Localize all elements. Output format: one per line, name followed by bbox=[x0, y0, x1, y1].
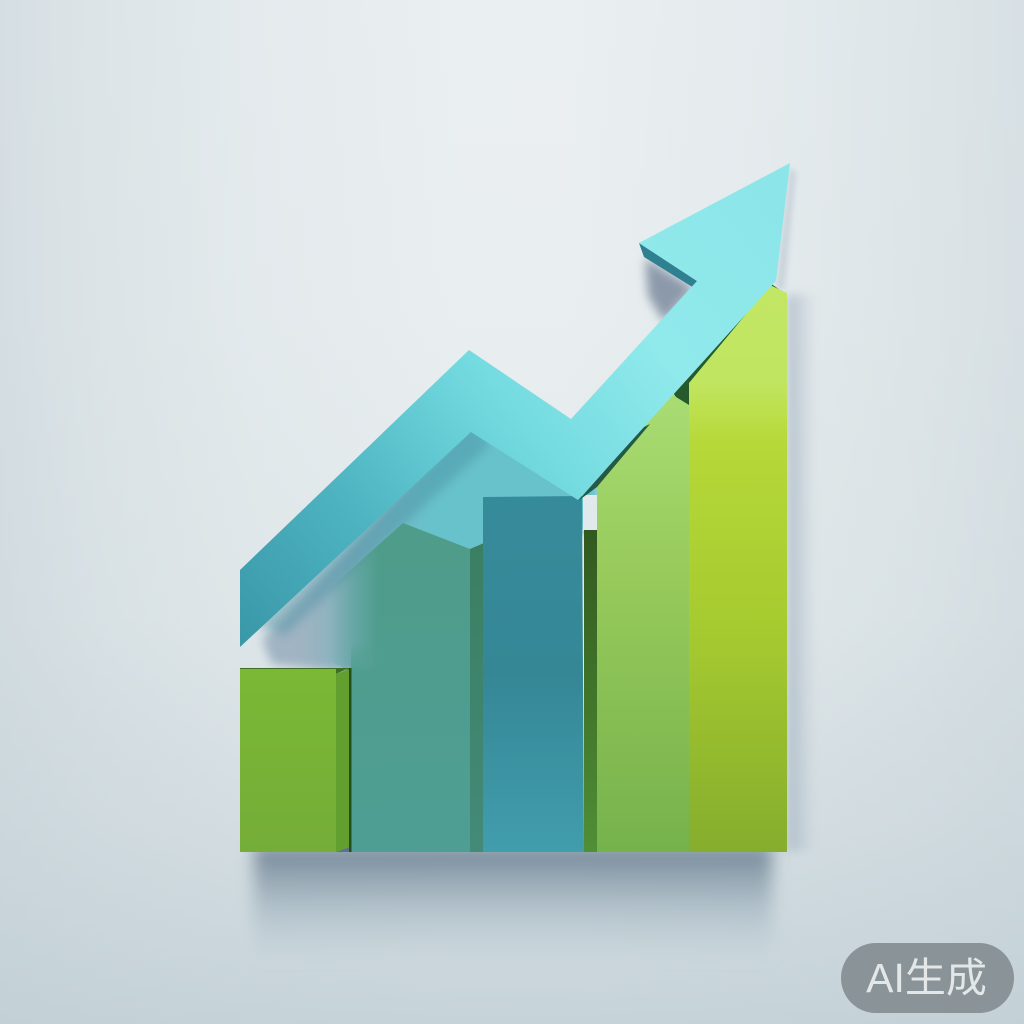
cast shadows bbox=[254, 168, 817, 961]
bar 5 back shadow wedge bbox=[670, 283, 780, 410]
bar 4: light green bbox=[597, 391, 689, 852]
side face between bars 3 and 4 bbox=[584, 530, 598, 852]
badge: AI generated bbox=[841, 943, 1014, 1013]
badge: AI generated: AI生成 bbox=[866, 955, 987, 1001]
bar 3: deep teal bbox=[483, 496, 584, 852]
recess behind arrow bbox=[255, 415, 600, 674]
arrow edge shadow bbox=[578, 424, 650, 501]
bar 1: green bbox=[240, 668, 352, 852]
bar 2: teal green bbox=[328, 523, 484, 852]
arrow notch edge bbox=[639, 243, 697, 288]
rising arrow bbox=[240, 163, 790, 647]
bar 5: lime bbox=[689, 285, 787, 852]
